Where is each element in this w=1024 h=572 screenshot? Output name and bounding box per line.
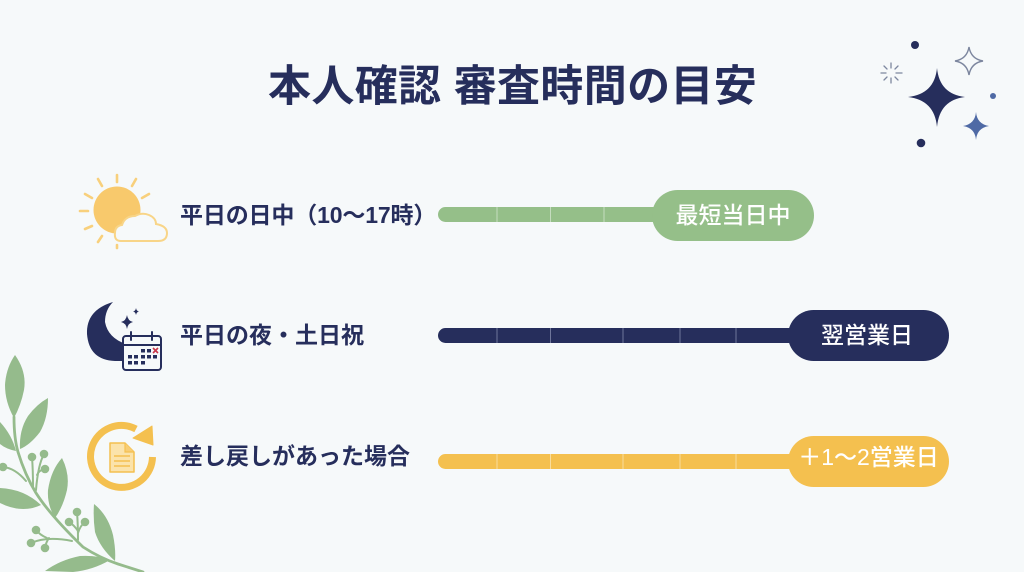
pill text: plus one to two business days: ＋1〜2営業日 bbox=[798, 444, 939, 470]
label: returned application: 差し戻しがあった場合 bbox=[180, 443, 410, 469]
pill text: same day: 最短当日中 bbox=[676, 202, 790, 228]
label: weekday daytime: 平日の日中（10〜17時） bbox=[180, 202, 436, 228]
bar: weekday daytime bbox=[438, 190, 814, 241]
icon: document with return arrow bbox=[91, 425, 153, 487]
icon: moon and calendar bbox=[87, 302, 161, 370]
icon: leaf branch bbox=[0, 355, 143, 572]
label: weeknight and holidays: 平日の夜・土日祝 bbox=[180, 322, 364, 348]
title: 本人確認 審査時間の目安 bbox=[268, 63, 757, 111]
icon: sparkles bbox=[881, 41, 996, 147]
bar: returned application bbox=[438, 436, 949, 487]
bar: weeknight and holidays bbox=[438, 310, 949, 361]
icon: sun and cloud bbox=[80, 175, 167, 248]
pill text: next business day: 翌営業日 bbox=[821, 322, 913, 348]
